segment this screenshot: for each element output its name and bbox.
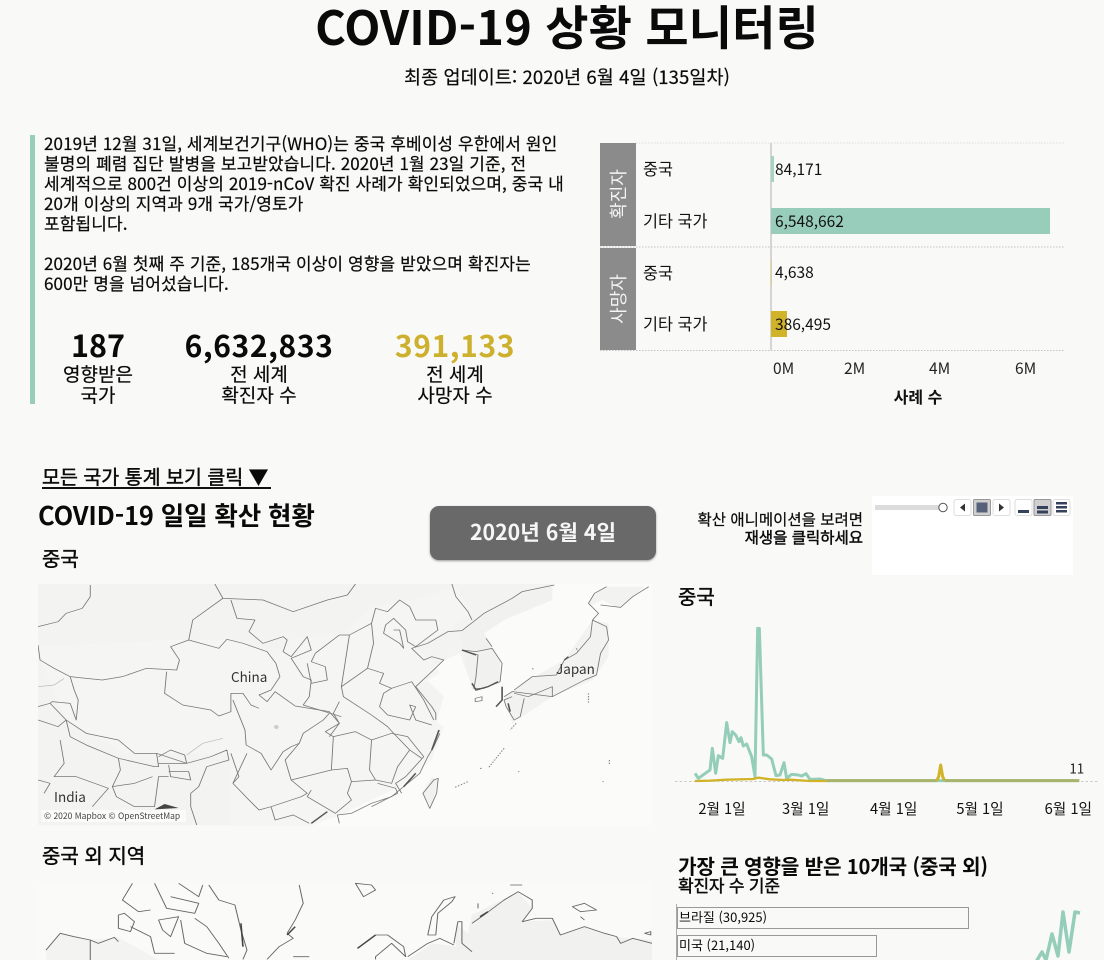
stat: confirmed: 전 세계 bbox=[230, 360, 288, 387]
intro text: 포함됩니다. bbox=[44, 210, 128, 235]
map labels: India bbox=[54, 786, 86, 806]
row: China deaths bbox=[643, 260, 814, 286]
Wuhan marker bbox=[274, 725, 279, 729]
row: other deaths: 386,495 bbox=[775, 313, 831, 335]
stat: countries bbox=[63, 322, 133, 408]
dense coasts bbox=[311, 650, 568, 823]
row: other confirmed: 기타 국가 bbox=[643, 208, 707, 232]
row: other deaths: 기타 국가 bbox=[643, 311, 707, 335]
intro text: 20개 이상의 지역과 9개 국가/영토가 bbox=[44, 190, 303, 215]
date badge bbox=[430, 506, 656, 560]
x axis labels: 2월 1일 bbox=[698, 798, 746, 819]
row: China deaths: 중국 bbox=[643, 260, 673, 284]
stat: deaths bbox=[395, 322, 515, 408]
animation hint: 확산 애니메이션을 보려면 bbox=[697, 508, 863, 530]
line: deaths bbox=[695, 778, 827, 781]
islands bbox=[455, 648, 609, 787]
stat: confirmed bbox=[185, 322, 333, 408]
heading: China line chart: 중국 bbox=[678, 581, 715, 610]
intro text: 2020년 6월 첫째 주 기준, 185개국 이상이 영향을 받았으며 확진자는 bbox=[44, 250, 531, 275]
land bbox=[46, 933, 159, 960]
land bbox=[38, 584, 552, 825]
attribution: © 2020 Mapbox © OpenStreetMap bbox=[44, 810, 180, 822]
x axis labels: 3월 1일 bbox=[782, 798, 829, 819]
chart: top countries bars bbox=[676, 904, 1080, 960]
x axis labels bbox=[773, 357, 1036, 379]
map labels bbox=[54, 658, 595, 806]
row: China confirmed: 중국 bbox=[643, 156, 673, 180]
date badge: 2020년 6월 4일 bbox=[470, 516, 616, 547]
stat: countries: 187 bbox=[71, 322, 125, 366]
x axis labels: 4M bbox=[929, 357, 950, 379]
playback buttons bbox=[954, 500, 1010, 516]
accent bar bbox=[30, 135, 35, 404]
map: China bbox=[38, 584, 649, 826]
bar: Brazil bbox=[677, 907, 969, 929]
faint borders bbox=[38, 678, 223, 755]
intro text: 2019년 12월 31일, 세계보건기구(WHO)는 중국 후베이성 우한에서 원인 bbox=[44, 130, 557, 155]
x axis labels bbox=[698, 798, 1092, 819]
intro text: 세계적으로 800건 이상의 2019-nCoV 확진 사례가 확인되었으며, 중국 내 bbox=[44, 170, 564, 195]
sparkline bbox=[1035, 910, 1080, 960]
stat: deaths: 전 세계 bbox=[426, 360, 484, 387]
map labels: China bbox=[231, 666, 267, 686]
heading: top 10 countries bbox=[678, 851, 988, 897]
x axis labels: 5월 1일 bbox=[956, 798, 1004, 819]
x axis labels: 2M bbox=[844, 357, 865, 379]
attribution background bbox=[41, 810, 186, 822]
stat: countries: 영향받은 bbox=[63, 360, 133, 387]
row: other confirmed: 6,548,662 bbox=[775, 210, 844, 232]
category band: deaths: 사망자 bbox=[605, 274, 631, 324]
intro text bbox=[44, 130, 564, 295]
map labels: Japan bbox=[556, 658, 595, 678]
panel: summary bbox=[30, 130, 564, 408]
bar: USA: 미국 (21,140) bbox=[679, 935, 755, 954]
heading: outside China: 중국 외 지역 bbox=[42, 840, 145, 869]
category band: deaths bbox=[600, 248, 636, 350]
row: China deaths: 4,638 bbox=[775, 261, 814, 283]
link: view all country stats: 모든 국가 통계 보기 클릭 ▼ bbox=[42, 461, 268, 490]
row: China confirmed: 84,171 bbox=[775, 158, 822, 180]
borders bbox=[38, 584, 649, 825]
heading: China map: 중국 bbox=[42, 543, 79, 572]
bar: Brazil: 브라질 (30,925) bbox=[679, 907, 767, 926]
x axis labels: 0M bbox=[773, 357, 794, 379]
intro text: 600만 명을 넘어섰습니다. bbox=[44, 270, 229, 295]
row: other deaths bbox=[643, 311, 831, 337]
line: overlap bbox=[827, 776, 937, 785]
line: confirmed bbox=[695, 628, 1078, 781]
bar: USA bbox=[677, 935, 877, 957]
heading line: 가장 큰 영향을 받은 10개국 (중국 외) bbox=[678, 851, 988, 880]
speed buttons bbox=[1015, 500, 1070, 516]
section heading: COVID-19 일일 확산 현황 bbox=[38, 496, 315, 533]
animation hint bbox=[697, 508, 863, 548]
row: other confirmed bbox=[643, 208, 1050, 234]
stat: deaths: 391,133 bbox=[395, 322, 515, 366]
stat: deaths: 사망자 수 bbox=[417, 381, 493, 408]
coastlines bbox=[46, 883, 652, 960]
stat: confirmed: 확진자 수 bbox=[221, 381, 297, 408]
bar chart: cases by region bbox=[600, 142, 1064, 408]
slider bbox=[875, 503, 947, 512]
subtitle: last update: 최종 업데이트: 2020년 6월 4일 (135일차) bbox=[404, 64, 730, 90]
row: China confirmed bbox=[643, 156, 822, 182]
stat: confirmed: 6,632,833 bbox=[185, 322, 333, 366]
line chart: China daily bbox=[675, 626, 1098, 819]
stat: countries: 국가 bbox=[81, 381, 115, 408]
end value: 11 bbox=[1069, 759, 1084, 778]
animation controls bbox=[875, 499, 1070, 516]
x axis labels: 6M bbox=[1015, 357, 1036, 379]
x axis title: 사례 수 bbox=[894, 384, 943, 408]
subheading: 확진자 수 기준 bbox=[678, 872, 780, 897]
x axis labels: 6월 1일 bbox=[1045, 798, 1092, 819]
axis bbox=[676, 904, 677, 960]
intro text: 불명의 폐렴 집단 발병을 보고받았습니다. 2020년 1월 23일 기준, 전 bbox=[44, 150, 526, 175]
category band: confirmed: 확진자 bbox=[605, 169, 631, 219]
animation hint: 재생을 클릭하세요 bbox=[745, 526, 863, 548]
category band: confirmed bbox=[600, 143, 636, 246]
x axis labels: 4월 1일 bbox=[870, 798, 917, 819]
map: world bbox=[46, 882, 652, 960]
